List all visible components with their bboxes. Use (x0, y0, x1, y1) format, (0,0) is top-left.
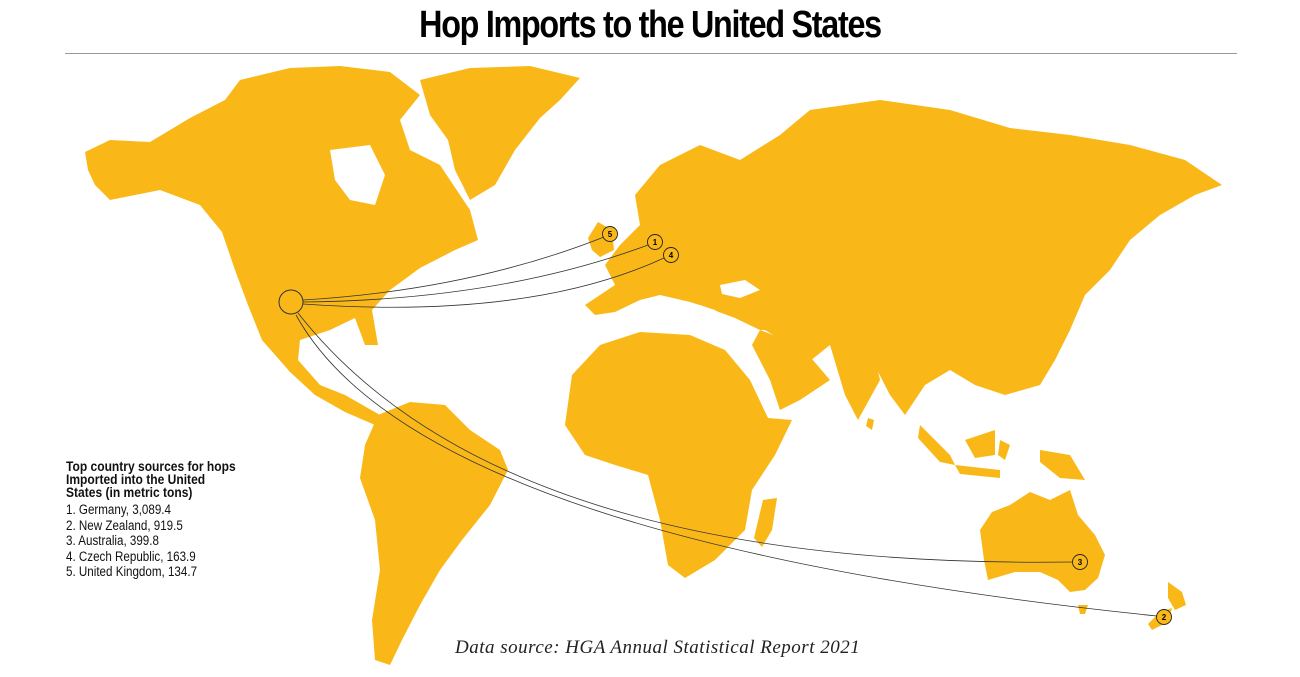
Sri Lanka (866, 418, 874, 430)
Africa (565, 332, 792, 578)
data source: Data source: HGA Annual Statistical Report 2021 (455, 637, 860, 658)
Mediterranean (620, 300, 760, 338)
origin circle (279, 290, 303, 314)
Japan (1030, 270, 1062, 338)
South America (360, 402, 508, 665)
legend: 3. Australia, 399.8 (66, 533, 159, 548)
markers (602, 226, 1172, 624)
Greenland (420, 66, 580, 200)
legend: 1. Germany, 3,089.4 (66, 502, 171, 517)
legend: 5. United Kingdom, 134.7 (66, 564, 197, 579)
route lines (296, 237, 1157, 616)
legend: Top country sources for hops Imported into the United States (in metric tons) (66, 458, 236, 500)
UK (588, 222, 614, 257)
title: Hop Imports to the United States (419, 4, 881, 46)
markers: 5 (608, 230, 613, 239)
New Zealand (1168, 582, 1186, 610)
Hudson Bay (330, 145, 385, 205)
Australia (980, 490, 1105, 592)
legend: 2. New Zealand, 919.5 (66, 518, 183, 532)
North America (85, 66, 478, 425)
India (830, 345, 880, 420)
markers: 3 (1078, 558, 1083, 567)
Madagascar (754, 498, 777, 547)
legend (66, 458, 236, 579)
legend: 4. Czech Republic, 163.9 (66, 548, 196, 564)
markers: 2 (1162, 613, 1167, 622)
Black Sea (720, 280, 760, 298)
Europe & Asia (585, 100, 1222, 415)
markers: 4 (669, 251, 674, 260)
Arabia (752, 330, 830, 410)
SE Asia islands (918, 425, 955, 465)
markers: 1 (653, 238, 658, 247)
